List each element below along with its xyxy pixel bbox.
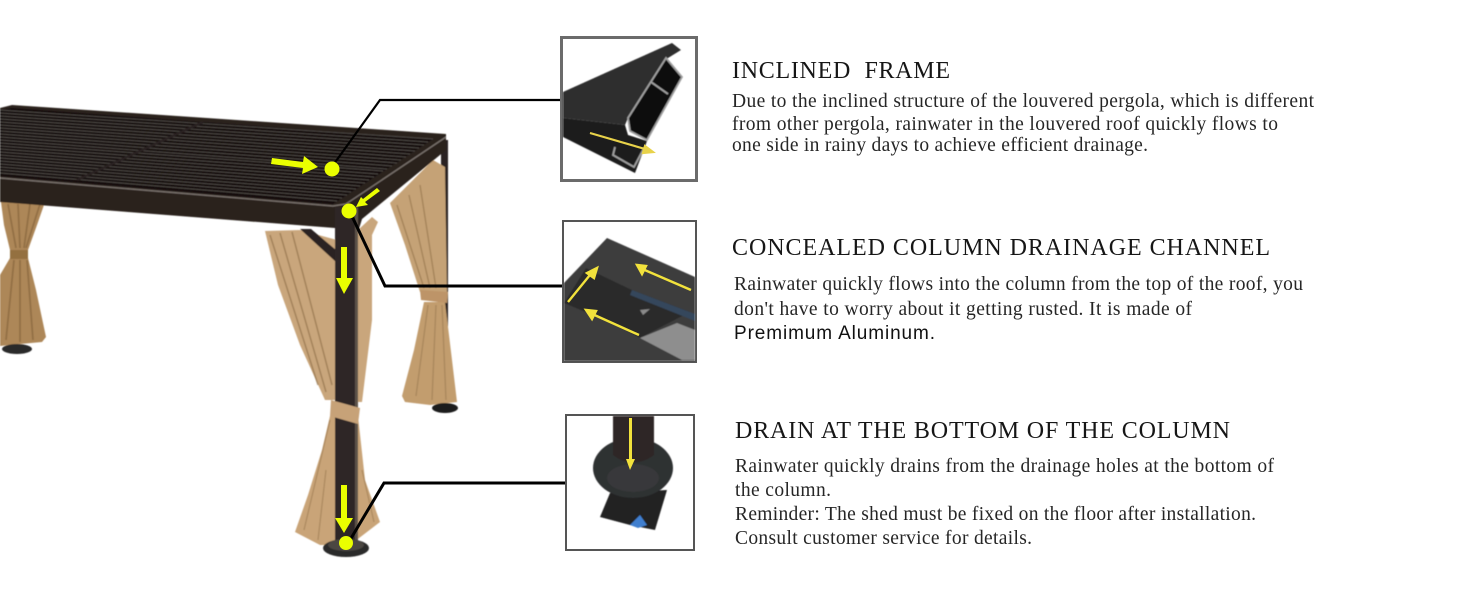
leader line: drainage channel [350, 212, 563, 286]
body text: from other pergola, rainwater in the louvered roof quickly flows to [732, 114, 1278, 135]
thumbnail: column base [566, 415, 694, 550]
arrow: water down column [626, 418, 635, 470]
arrows: water into column [568, 265, 691, 335]
body text [735, 456, 1274, 549]
body text: Premimum Aluminum. [734, 323, 935, 344]
heading: INCLINED FRAME [732, 58, 950, 84]
section: concealed column drainage channel [732, 235, 1303, 344]
body text: Rainwater quickly flows into the column from the top of the roof, you [734, 274, 1303, 295]
thumbnail: drainage channel [563, 221, 696, 362]
body text: Consult customer service for details. [735, 528, 1032, 549]
pergola illustration [0, 105, 458, 557]
pergola roof [0, 105, 446, 262]
section: drain at the bottom of the column [735, 418, 1274, 549]
arrow: flow across roof [271, 156, 318, 174]
body text: don't have to worry about it getting rusted. It is made of [734, 299, 1192, 320]
body text [732, 91, 1315, 156]
arrow: flow down column [336, 247, 353, 294]
section: inclined frame [732, 58, 1315, 156]
marker: base dot [339, 536, 353, 550]
marker: corner dot [342, 204, 356, 218]
curtain: front post [265, 217, 380, 545]
yellow markers and arrows [271, 156, 380, 550]
arrow: flow to corner [356, 188, 380, 207]
heading: DRAIN AT THE BOTTOM OF THE COLUMN [735, 418, 1230, 444]
body text: one side in rainy days to achieve efficient drainage. [732, 135, 1148, 156]
body text: the column. [735, 480, 831, 501]
leader line: column bottom [350, 483, 566, 540]
curtain: back right [390, 140, 458, 413]
leader line: inclined frame [331, 100, 561, 168]
body text: Due to the inclined structure of the louvered pergola, which is different [732, 91, 1315, 112]
body text: Rainwater quickly drains from the drainage holes at the bottom of [735, 456, 1274, 477]
curtain: far left [0, 202, 46, 354]
arrow: flow to base [335, 485, 353, 533]
front corner post [323, 207, 369, 557]
thumbnail: inclined frame [562, 38, 696, 180]
marker: roof dot [324, 162, 340, 176]
heading: CONCEALED COLUMN DRAINAGE CHANNEL [732, 235, 1270, 261]
body text: Reminder: The shed must be fixed on the floor after installation. [735, 504, 1256, 525]
arrow: water along frame [590, 133, 653, 153]
body text [734, 274, 1303, 344]
